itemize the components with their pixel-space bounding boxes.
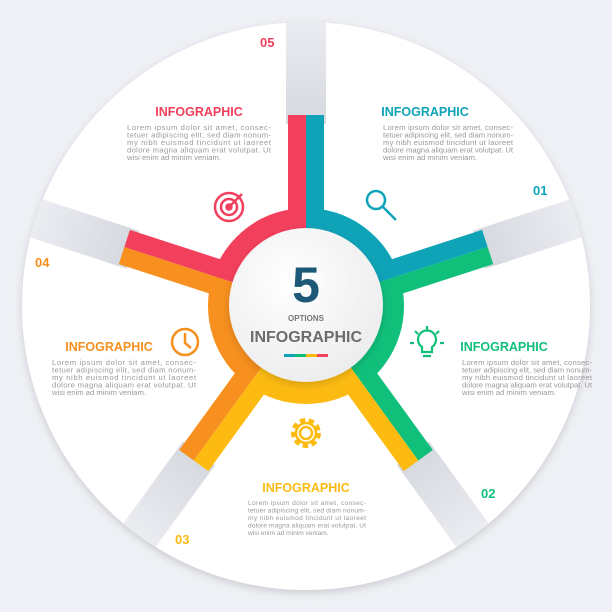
panel 02: wisi enim ad minim veniam. [461, 388, 556, 397]
panel 04: tetuer adipiscing elit, sed diam nonum- [52, 366, 196, 374]
panel 04: INFOGRAPHIC [65, 340, 153, 354]
panel 02: INFOGRAPHIC [460, 340, 548, 354]
panel 04: my nibh euismod tincidunt ut laoreet [52, 373, 197, 382]
panel 01: 01 [533, 183, 547, 198]
panel 02: Lorem ipsum dolor sit amet, consec- [462, 358, 592, 367]
panel 04: dolore magna aliquam erat volutpat. Ut [52, 380, 197, 390]
panel 03: my nibh euismod tincidunt ut laoreet [248, 515, 366, 522]
colored ring and spokes [119, 115, 493, 471]
panel 05: wisi enim ad minim veniam. [126, 153, 221, 162]
center circle [229, 228, 383, 382]
panel 01: INFOGRAPHIC [381, 105, 469, 119]
panel 01: Lorem ipsum dolor sit amet, consec- [383, 123, 513, 132]
icon: clock [172, 329, 198, 355]
panel 03: INFOGRAPHIC [262, 481, 350, 495]
panel 01 [367, 105, 547, 220]
panel 05: Lorem ipsum dolor sit amet, consec- [127, 123, 271, 132]
center circle: OPTIONS [288, 314, 325, 323]
panel 04: wisi enim ad minim veniam. [51, 388, 146, 397]
panel 02: tetuer adipiscing elit, sed diam nonum- [462, 366, 592, 374]
panel 03 [175, 421, 366, 547]
center circle: INFOGRAPHIC [250, 329, 362, 346]
panel 05 [126, 35, 274, 221]
panel 01: dolore magna aliquam erat volutpat. Ut [383, 146, 514, 154]
center circle: 5 [292, 257, 320, 313]
panel 02 [410, 326, 593, 501]
icon: target [215, 193, 243, 221]
panel 01: tetuer adipiscing elit, sed diam nonum- [383, 130, 513, 140]
panel 03: tetuer adipiscing elit, sed diam nonum- [248, 508, 366, 514]
panel 05: INFOGRAPHIC [155, 105, 243, 119]
panel 05: 05 [260, 35, 274, 50]
panel 01: wisi enim ad minim veniam. [382, 153, 477, 162]
panel 04: 04 [35, 255, 50, 270]
panel 04 [35, 255, 198, 397]
panel 03: 03 [175, 532, 189, 547]
panel 02: my nibh euismod tincidunt ut laoreet [462, 373, 593, 382]
panel 02: 02 [481, 486, 495, 501]
icon: gear [294, 421, 318, 445]
panel 01: my nibh euismod tincidunt ut laoreet [383, 138, 514, 147]
panel 03: dolore magna aliquam erat volutpat. Ut [248, 522, 366, 530]
panel 03: wisi enim ad minim veniam. [247, 530, 329, 537]
panel 05: my nibh euismod tincidunt ut laoreet [127, 138, 272, 147]
panel 02: dolore magna aliquam erat volutpat. Ut [462, 380, 593, 390]
panel 05: tetuer adipiscing elit, sed diam nonum- [127, 130, 271, 140]
panel 05: dolore magna aliquam erat volutpat. Ut [127, 146, 272, 154]
panel 03: Lorem ipsum dolor sit amet, consec- [248, 500, 366, 507]
icon: bulb [410, 326, 444, 356]
panel 04: Lorem ipsum dolor sit amet, consec- [52, 358, 196, 367]
icon: magnifier [367, 191, 396, 220]
